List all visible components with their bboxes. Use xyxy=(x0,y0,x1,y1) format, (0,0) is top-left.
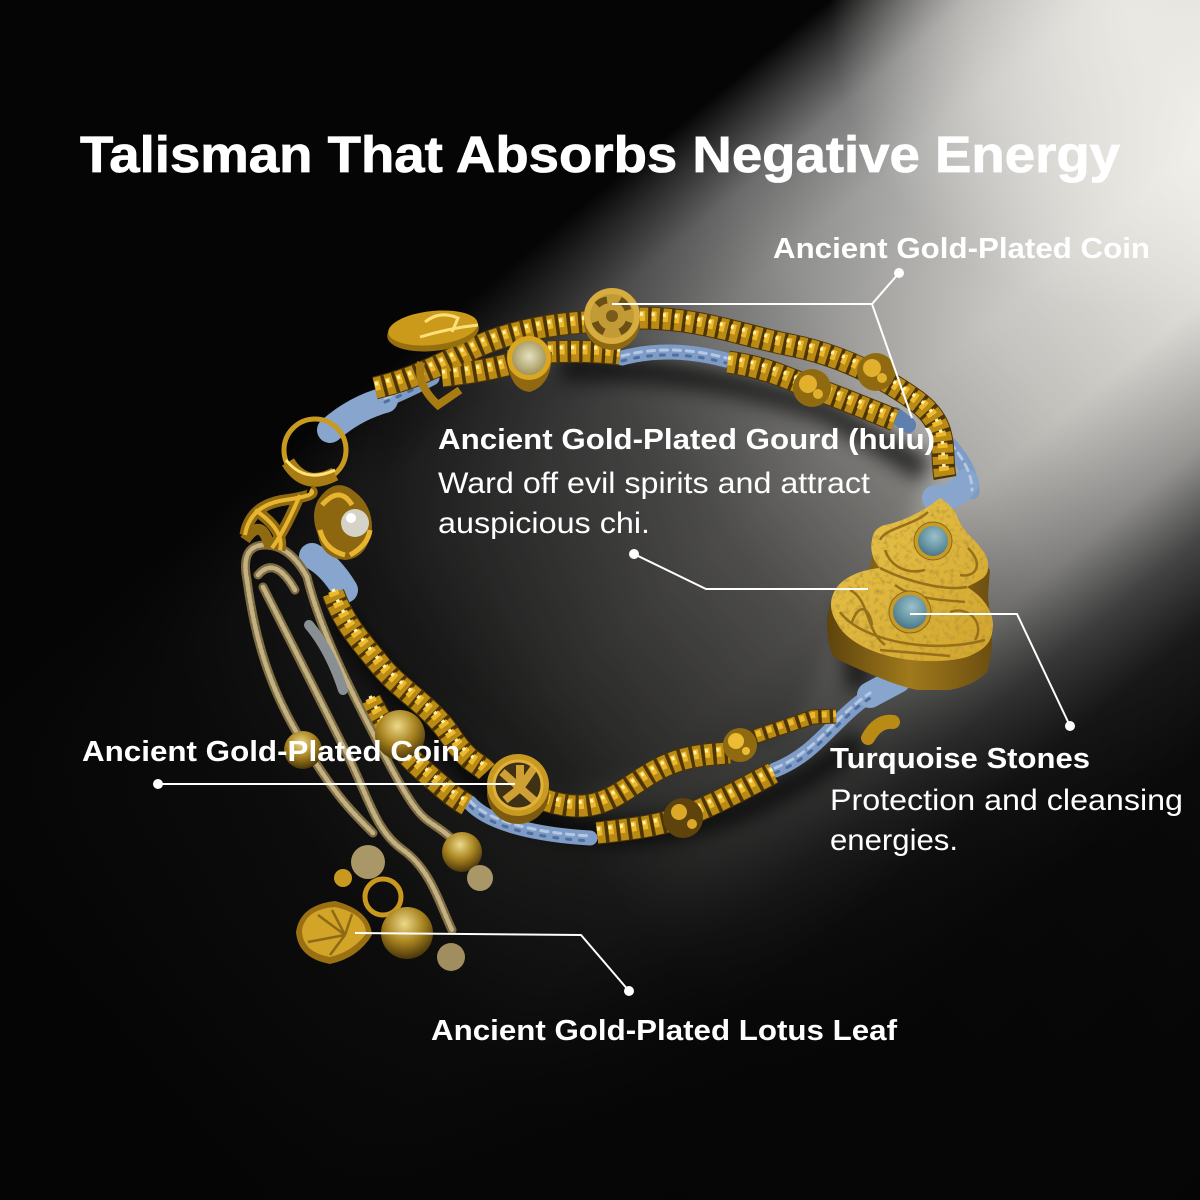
callout: gourd: auspicious chi. xyxy=(438,507,650,540)
callout: turquoise stones: energies. xyxy=(830,824,958,857)
icon: knotted gold spacers xyxy=(663,353,895,838)
callout: turquoise stones xyxy=(830,614,1183,857)
title: Talisman That Absorbs Negative Energy xyxy=(80,126,1121,183)
turquoise stone lower xyxy=(889,591,931,633)
callout: upper coin: Ancient Gold-Plated Coin xyxy=(773,233,1150,265)
turquoise stone upper xyxy=(914,522,952,560)
darker interior of bracelet xyxy=(350,370,925,790)
callout: lower coin xyxy=(82,736,515,789)
gourd engraving xyxy=(840,512,985,656)
icon: round pearl bezel bead xyxy=(507,336,552,392)
blue rope segments xyxy=(312,350,972,841)
clasp ring and charm tangle xyxy=(245,419,346,550)
callout: lotus leaf: Ancient Gold-Plated Lotus Leaf xyxy=(431,1015,897,1047)
callout: upper coin xyxy=(612,233,1150,418)
callout: turquoise stones: Turquoise Stones xyxy=(830,743,1090,775)
callout: gourd: Ancient Gold-Plated Gourd (hulu) xyxy=(438,424,935,456)
icon: gourd pendant xyxy=(827,498,993,690)
tan tassel cords xyxy=(245,545,452,930)
icon: gold balls xyxy=(284,710,493,891)
flower charm with pearl xyxy=(314,485,372,560)
icon: lower coin xyxy=(487,754,549,824)
icon: upper oval coin xyxy=(385,306,481,405)
callout: turquoise stones: Protection and cleansing xyxy=(830,784,1183,817)
bracelet xyxy=(245,288,993,971)
gold bead strands xyxy=(333,314,945,833)
callout: gourd xyxy=(438,424,935,589)
shadows under bracelet xyxy=(340,368,925,833)
callout: lotus leaf xyxy=(355,933,897,1047)
callout: gourd: Ward off evil spirits and attract xyxy=(438,467,871,500)
icon: upper coin xyxy=(584,288,640,350)
callout: lower coin: Ancient Gold-Plated Coin xyxy=(82,736,460,768)
icon: lotus leaf charm xyxy=(296,845,465,971)
